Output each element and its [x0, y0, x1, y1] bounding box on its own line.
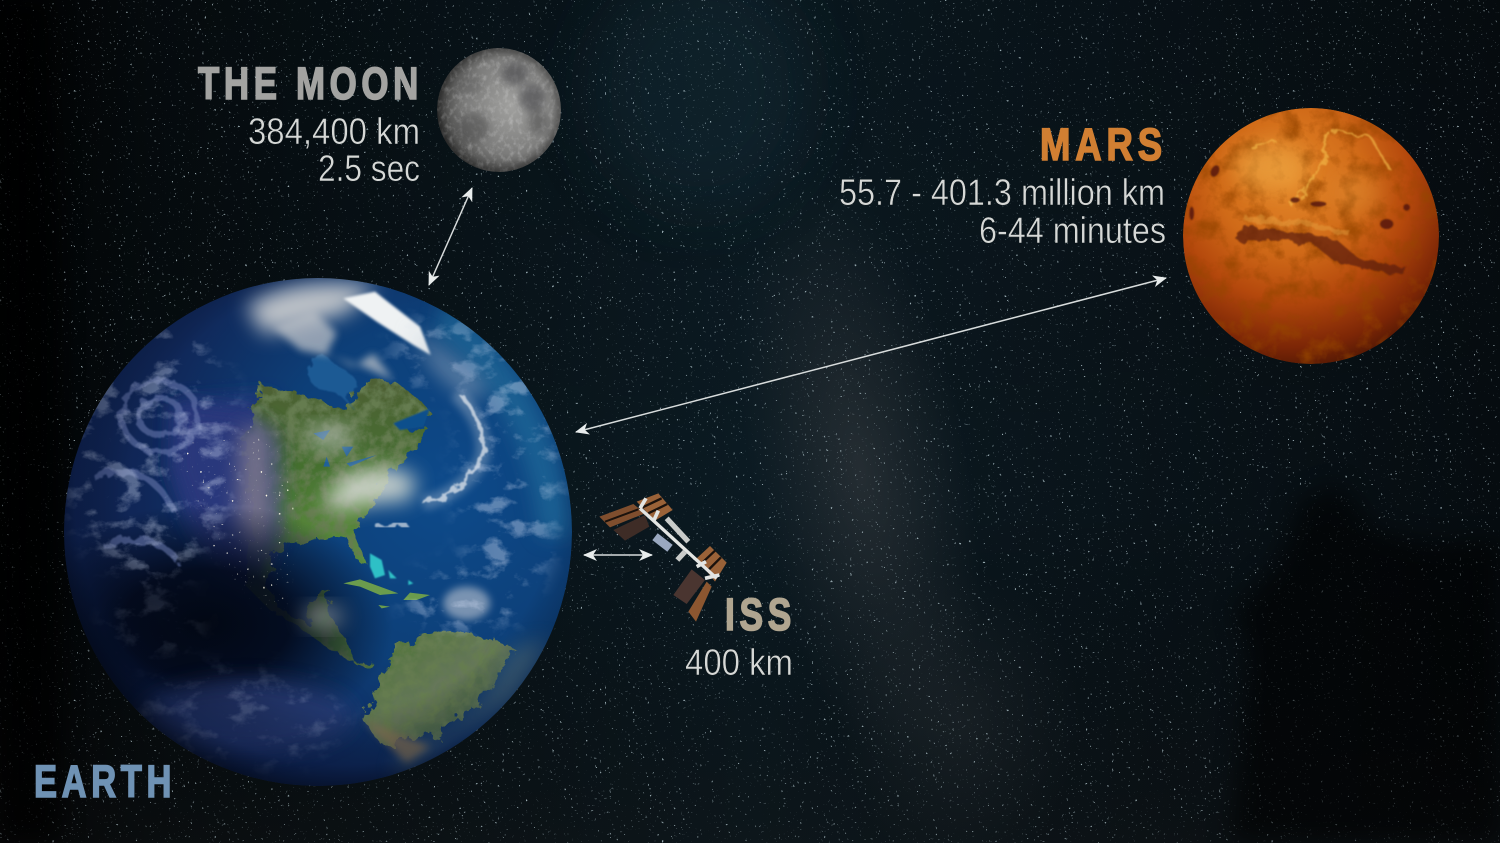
lunar maria [457, 63, 548, 143]
planet: Moon [437, 48, 561, 172]
ISS truss and modules [640, 498, 719, 578]
cloud cluster: Atlantic [443, 587, 490, 620]
ISS solar array, lower brown [688, 582, 712, 622]
Hudson Bay [303, 355, 357, 408]
label: The Moon: 2.5 sec [318, 148, 420, 189]
Canadian Arctic snow [273, 310, 393, 380]
ISS solar array, shaded [613, 515, 649, 541]
Atlantic ice and cloud band [410, 327, 487, 403]
label: Mars: MARS [1040, 119, 1167, 170]
land: North America [247, 380, 430, 667]
label: Mars: 6-44 minutes [979, 210, 1166, 251]
ice: Greenland [343, 292, 431, 355]
earth surface, drawn in magnified coordinates [20, 283, 570, 773]
ISS solar array, lower shaded [673, 569, 705, 604]
label: The Moon [198, 58, 423, 189]
limb tint: teal Atlantic edge [437, 300, 570, 537]
bright dust highlands [1233, 143, 1307, 190]
city lights [60, 270, 580, 790]
label: Mars: 55.7 - 401.3 million km [839, 172, 1165, 213]
label: ISS: 400 km [685, 642, 793, 683]
planet: Mars [1183, 108, 1439, 364]
planet: Earth [64, 278, 572, 786]
label: ISS [685, 589, 796, 683]
bright ridges [1247, 130, 1390, 233]
polar cloud cap [247, 283, 377, 333]
ISS solar array, upper left [599, 504, 645, 527]
cloud: East coast [323, 467, 417, 510]
arrow: Earth to Moon [429, 188, 472, 285]
southern night clouds [140, 680, 353, 753]
land: South America [363, 632, 513, 747]
Gulf of St Lawrence [393, 408, 430, 430]
arrow: Earth to Mars [576, 278, 1166, 432]
cloud swirl: Atlantic front [423, 393, 483, 503]
South America desert edge [393, 640, 550, 773]
Great Lakes [313, 430, 377, 467]
islands: Cuba and Hispaniola [343, 579, 430, 608]
shallow sea: Bahamas [370, 553, 413, 585]
dusk transition band [240, 407, 291, 574]
spacecraft: ISS [599, 493, 727, 622]
night-side land with violet cast [168, 392, 262, 516]
label: Earth: EARTH [34, 756, 176, 807]
label: The Moon: THE MOON [198, 58, 423, 109]
canyon: Valles Marineris [1233, 227, 1410, 274]
label: Mars [839, 119, 1167, 251]
volcanic spots [1189, 164, 1410, 229]
storm swirl: Pacific [93, 382, 198, 563]
label: ISS: ISS [725, 589, 796, 640]
ISS solar array, lower right [697, 546, 727, 582]
arrow: Earth to ISS [584, 554, 652, 556]
label: The Moon: 384,400 km [248, 111, 420, 152]
wispy cloud texture [60, 270, 580, 790]
ISS solar array, upper right [637, 493, 673, 521]
dark night ocean [71, 510, 384, 706]
